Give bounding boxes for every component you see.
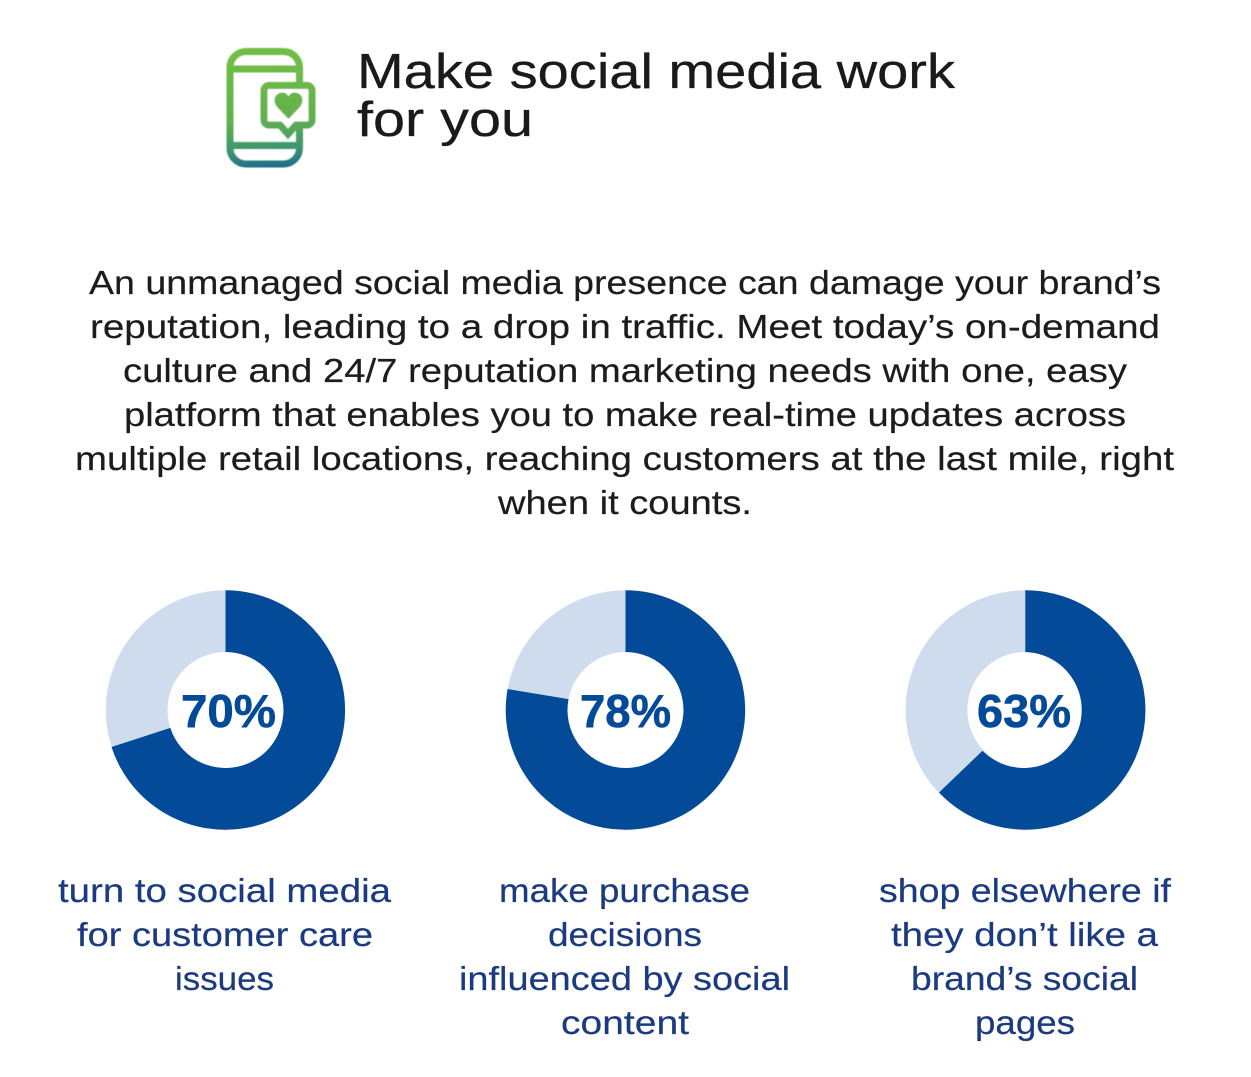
icon: speech bubble bbox=[264, 86, 312, 134]
donut chart: 78% bbox=[506, 590, 745, 830]
caption: 78%: make purchase bbox=[499, 873, 750, 910]
icon: phone top bar bbox=[230, 66, 300, 72]
value: 63%: 63% bbox=[977, 685, 1071, 737]
icon: phone body bbox=[230, 51, 300, 164]
donut chart: 63% bbox=[906, 590, 1145, 830]
intro paragraph: An unmanaged social media presence can damage your brand’s bbox=[89, 265, 1161, 302]
title bbox=[357, 45, 956, 147]
caption: 70% bbox=[58, 873, 391, 998]
caption: 78%: content bbox=[561, 1005, 690, 1042]
caption: 63%: pages bbox=[975, 1005, 1075, 1042]
icon: phone bottom bar bbox=[230, 142, 300, 149]
caption: 70%: issues bbox=[175, 961, 274, 998]
intro paragraph: multiple retail locations, reaching customers at the last mile, right bbox=[75, 441, 1175, 478]
caption: 78% bbox=[459, 873, 790, 1042]
caption: 78%: influenced by social bbox=[459, 961, 790, 998]
title: for you bbox=[357, 93, 533, 147]
intro paragraph: reputation, leading to a drop in traffic. Meet today’s on-demand bbox=[90, 309, 1160, 346]
donut chart: 70% bbox=[106, 590, 345, 830]
panel: 70% stat bbox=[58, 590, 391, 998]
icon: heart bbox=[274, 92, 303, 119]
intro paragraph bbox=[75, 265, 1175, 522]
intro paragraph: culture and 24/7 reputation marketing needs with one, easy bbox=[123, 353, 1127, 390]
caption: 78%: decisions bbox=[548, 917, 702, 954]
panel: 63% stat bbox=[879, 590, 1172, 1042]
caption: 63%: brand’s social bbox=[911, 961, 1138, 998]
caption: 70%: turn to social media bbox=[58, 873, 391, 910]
caption: 70%: for customer care bbox=[77, 917, 373, 954]
intro paragraph: when it counts. bbox=[497, 485, 752, 522]
caption: 63% bbox=[879, 873, 1172, 1042]
intro paragraph: platform that enables you to make real-time updates across bbox=[124, 397, 1126, 434]
value: 78%: 78% bbox=[580, 685, 671, 737]
panel: 78% stat bbox=[459, 590, 790, 1042]
caption: 63%: shop elsewhere if bbox=[879, 873, 1172, 910]
caption: 63%: they don’t like a bbox=[891, 917, 1158, 954]
title: Make social media work bbox=[357, 45, 956, 99]
icon: phone with heart speech bubble bbox=[230, 51, 312, 164]
value: 70%: 70% bbox=[181, 685, 276, 737]
